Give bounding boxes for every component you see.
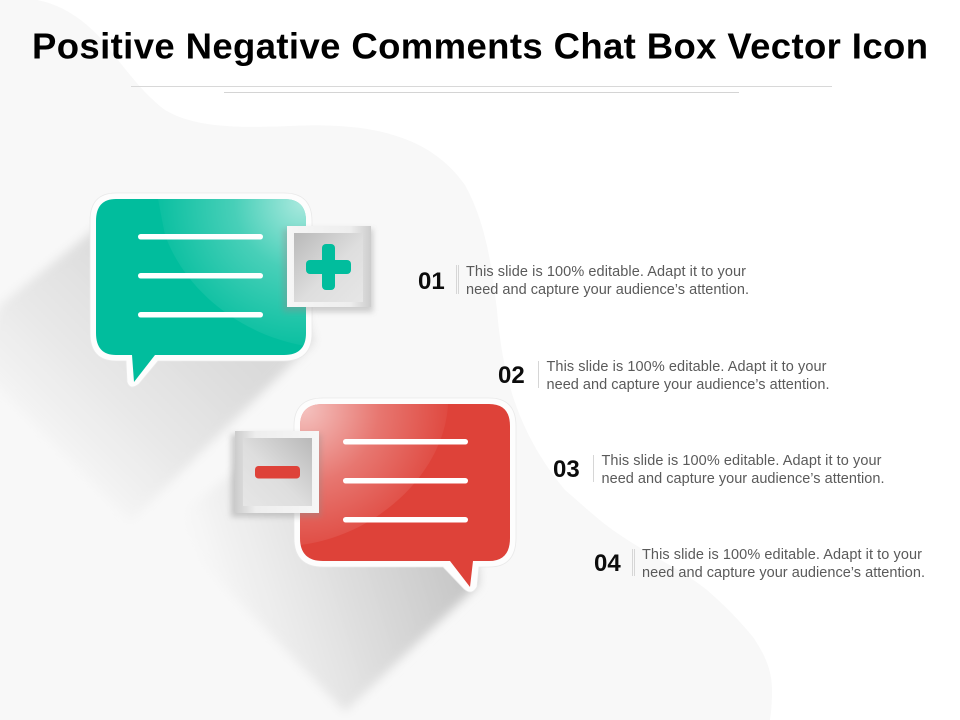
bubble outline — [294, 398, 516, 592]
separator — [593, 455, 594, 482]
separator — [456, 265, 459, 294]
plus tile — [283, 226, 373, 312]
tile frame — [235, 431, 319, 513]
title divider — [131, 86, 832, 93]
description: need and capture your audience’s attention. — [466, 282, 749, 298]
long shadow: green bubble — [0, 225, 314, 522]
item 03 — [553, 453, 884, 487]
description: need and capture your audience’s attention. — [602, 471, 884, 487]
description: This slide is 100% editable. Adapt it to your — [466, 264, 746, 280]
item 02 — [498, 359, 830, 393]
description: This slide is 100% editable. Adapt it to your — [642, 547, 922, 563]
description: This slide is 100% editable. Adapt it to your — [602, 453, 882, 469]
number: 02 — [498, 362, 525, 389]
item 04 — [594, 547, 925, 581]
separator — [538, 361, 539, 388]
number: 03 — [553, 456, 580, 483]
bubble body — [96, 199, 306, 382]
icon: minus — [255, 466, 300, 478]
text lines — [138, 234, 263, 318]
number: 04 — [594, 550, 621, 577]
minus tile — [231, 431, 321, 517]
text lines — [343, 439, 468, 522]
description: need and capture your audience’s attention. — [642, 565, 925, 581]
separator — [632, 549, 635, 576]
tile face — [294, 233, 363, 302]
green chat bubble — [90, 193, 312, 387]
bubble gloss — [300, 404, 448, 545]
description: need and capture your audience’s attention. — [546, 377, 830, 393]
title: Positive Negative Comments Chat Box Vector Icon — [32, 26, 928, 66]
item 01 — [418, 264, 749, 298]
bubble body — [300, 404, 510, 587]
tile frame — [287, 226, 371, 307]
red chat bubble — [294, 398, 516, 592]
tile face — [243, 438, 312, 506]
number: 01 — [418, 268, 445, 295]
bubble gloss — [158, 199, 306, 346]
description: This slide is 100% editable. Adapt it to your — [546, 359, 827, 375]
icon: plus — [306, 244, 351, 290]
bubble outline — [90, 193, 312, 387]
long shadow: red bubble — [165, 445, 478, 712]
